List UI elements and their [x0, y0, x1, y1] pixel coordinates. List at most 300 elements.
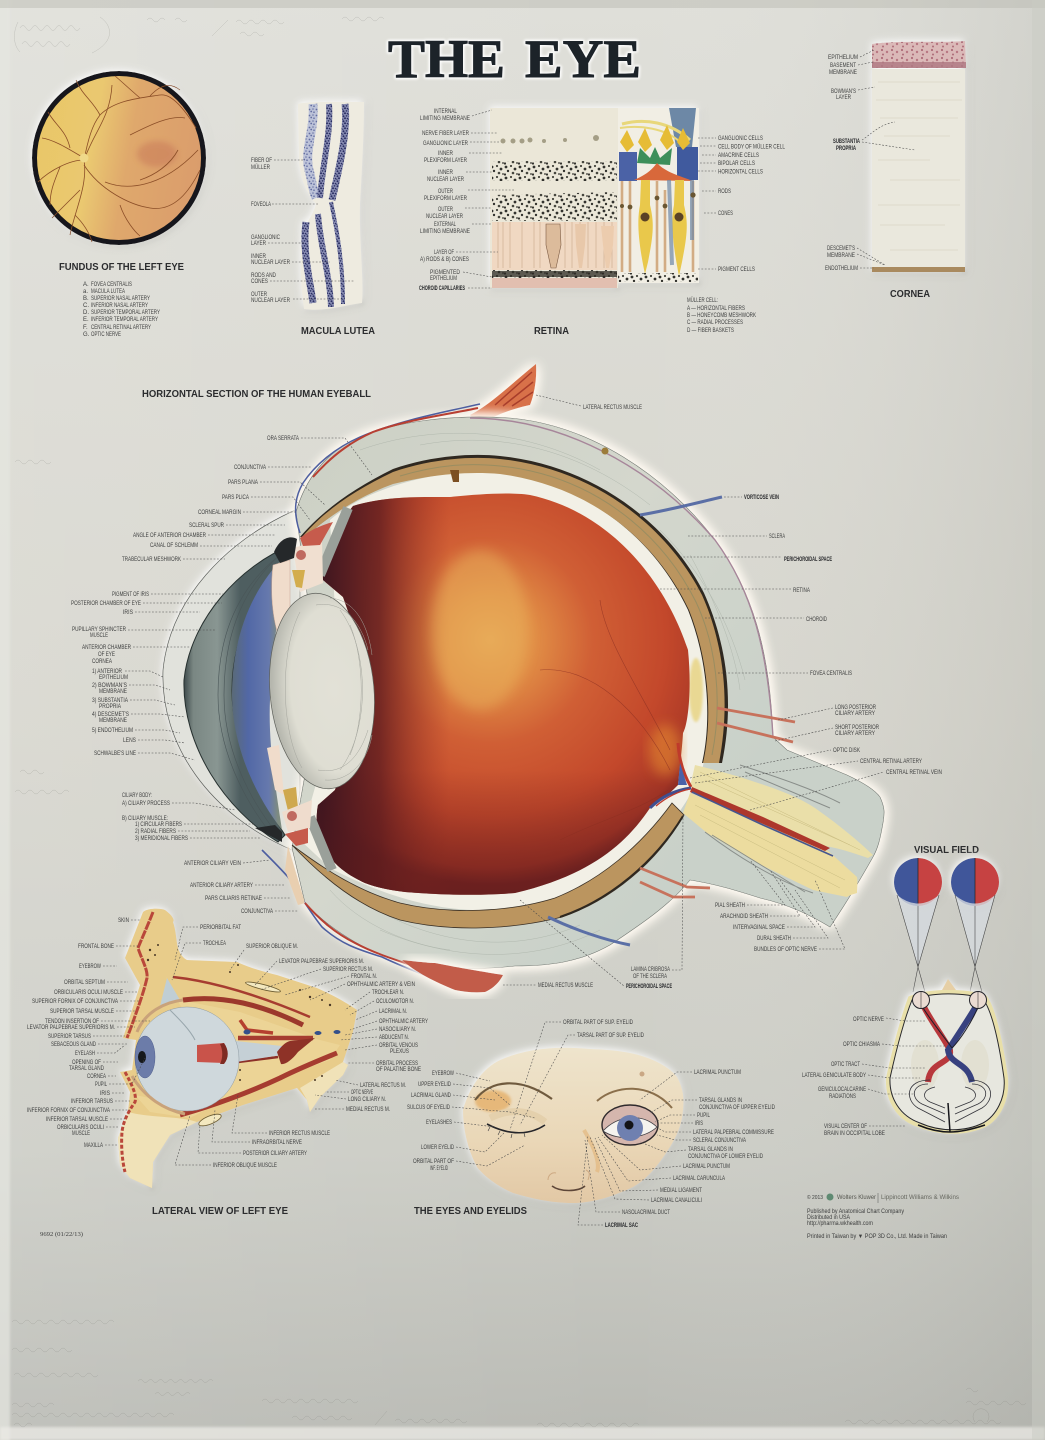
legend: G. — [83, 332, 90, 338]
retina right labels: CONES — [718, 211, 733, 217]
labels right: MEDIAL RECTUS M. — [346, 1107, 390, 1113]
labels right — [510, 1020, 776, 1229]
anterior chamber — [184, 545, 292, 842]
right labels: LATERAL RECTUS MUSCLE — [583, 405, 642, 411]
macula labels: RODS AND — [251, 273, 277, 279]
cornea labels: MEMBRANE — [827, 253, 855, 259]
posterior ciliary arteries — [640, 708, 795, 897]
left labels: CONJUNCTIVA — [241, 909, 273, 915]
muller cell key — [687, 297, 756, 334]
legend: SUPERIOR NASAL ARTERY — [91, 296, 150, 302]
macula labels: NUCLEAR LAYER — [251, 260, 291, 266]
retina left labels: A) RODS & B) CONES — [420, 257, 469, 263]
retina right labels: AMACRINE CELLS — [718, 153, 759, 159]
zonule fibres — [310, 508, 348, 870]
retina cream layer — [300, 470, 710, 910]
labels right: OF PALATINE BONE — [376, 1067, 421, 1073]
left labels: PARS CILIARIS RETINAE — [205, 896, 262, 902]
left labels: MEMBRANE — [99, 718, 127, 724]
labels left: INFERIOR TARSUS — [71, 1099, 113, 1105]
labels right: LACRIMAL N. — [379, 1009, 407, 1015]
open eye — [597, 1089, 672, 1145]
cornea labels: MEMBRANE — [829, 70, 857, 76]
panel: retina — [419, 108, 786, 337]
legend: SUPERIOR TEMPORAL ARTERY — [91, 310, 160, 316]
labels right: OPHTHALMIC ARTERY — [379, 1019, 428, 1025]
labels right: ABDUCENT N. — [379, 1035, 409, 1041]
labels right: ORBITAL PROCESS — [376, 1061, 418, 1067]
right labels: PERICHOROIDAL SPACE — [626, 984, 672, 990]
choroid upper band — [300, 455, 728, 763]
labels right — [172, 925, 428, 1169]
pathway labels — [802, 1017, 945, 1137]
labels right: CONJUNCTIVA OF UPPER EYELID — [699, 1105, 776, 1111]
retina left labels: INTERNAL — [434, 109, 458, 115]
retina left labels — [419, 109, 515, 292]
labels right: TARSAL PART OF SUP. EYELID — [577, 1033, 645, 1039]
retina left labels: PLEXIFORM LAYER — [424, 158, 468, 164]
brow and lid muscles — [122, 912, 337, 1172]
retina right labels: HORIZONTAL CELLS — [718, 170, 763, 176]
retina left labels: NUCLEAR LAYER — [427, 177, 464, 183]
left labels: OF EYE — [98, 652, 115, 658]
retina left labels: INNER — [438, 170, 454, 176]
title — [388, 29, 641, 89]
fundus: retinal interior — [317, 494, 690, 895]
labels left: ORBITAL PART OF — [413, 1159, 454, 1165]
pathway labels: BRAIN IN OCCIPITAL LOBE — [824, 1131, 885, 1137]
left labels: ANTERIOR CHAMBER — [82, 645, 132, 651]
labels left: EYEBROW — [432, 1071, 454, 1077]
labels left: UPPER EYELID — [418, 1082, 451, 1088]
labels right: FRONTAL N. — [351, 974, 377, 980]
heading: THE EYES AND EYELIDS — [414, 1206, 527, 1217]
publisher credits — [807, 1193, 960, 1240]
central retinal vessels at optic disc — [650, 743, 691, 808]
left labels: CANAL OF SCHLEMM — [150, 543, 198, 549]
labels right: OPTIC NERVE — [351, 1090, 373, 1096]
heading: FUNDUS OF THE LEFT EYE — [59, 262, 184, 273]
labels right: PLEXUS — [390, 1049, 409, 1055]
labels right: SUPERIOR OBLIQUE M. — [246, 944, 298, 950]
macula cross-section — [298, 102, 364, 310]
publisher credits: Wolters Kluwer — [837, 1194, 877, 1201]
macula labels: CONES — [251, 279, 268, 285]
small choroid spot — [450, 448, 608, 482]
labels left: PUPIL — [95, 1082, 107, 1088]
labels right: ORBITAL PART OF SUP. EYELID — [563, 1020, 634, 1026]
left labels: ANTERIOR CILIARY VEIN — [184, 861, 241, 867]
right labels: CILIARY ARTERY — [835, 731, 875, 737]
labels left: LOWER EYELID — [421, 1145, 454, 1151]
labels right: SCLERAL CONJUNCTIVA — [693, 1138, 746, 1144]
pathway labels: RADIATIONS — [829, 1094, 856, 1100]
right labels: FOVEA CENTRALIS — [810, 671, 852, 677]
sclera and optic nerve sheath — [292, 417, 884, 969]
retina left labels: NUCLEAR LAYER — [426, 214, 463, 220]
left labels: 1) CIRCULAR FIBERS — [135, 822, 182, 828]
labels left — [27, 918, 150, 1149]
title: EYE — [525, 29, 641, 89]
muller cell key: MÜLLER CELL: — [687, 297, 718, 304]
left labels: 1) ANTERIOR — [92, 669, 123, 675]
right labels: CENTRAL RETINAL ARTERY — [860, 759, 922, 765]
left labels — [71, 436, 372, 915]
left labels: ANGLE OF ANTERIOR CHAMBER — [133, 533, 207, 539]
right labels: OF THE SCLERA — [633, 974, 667, 980]
iris — [232, 555, 288, 830]
lens — [262, 589, 382, 793]
retina left labels: LIMITING MEMBRANE — [420, 116, 470, 122]
retina left labels: OUTER — [438, 189, 453, 195]
legend: OPTIC NERVE — [91, 332, 121, 338]
panel: cornea — [825, 41, 966, 300]
retina right labels: BIPOLAR CELLS — [718, 161, 755, 167]
icon: publisher logo — [826, 1194, 834, 1200]
icon: left visual field sphere — [894, 858, 942, 906]
labels left: SKIN — [118, 918, 129, 924]
labels right: TROCHLEAR N. — [372, 990, 404, 996]
pathway labels: VISUAL CENTER OF — [824, 1124, 867, 1130]
ovals: nerve sections — [197, 980, 281, 1128]
labels right: SUPERIOR RECTUS M. — [323, 967, 373, 973]
skull eyes — [912, 992, 986, 1008]
left labels: 2) BOWMAN'S — [92, 683, 127, 689]
right labels: MEDIAL RECTUS MUSCLE — [538, 983, 593, 989]
muller cell key: A — HORIZONTAL FIBERS — [687, 306, 745, 312]
cornea labels: BASEMENT — [830, 63, 856, 69]
heading: MACULA LUTEA — [301, 326, 375, 337]
right labels: ARACHNOID SHEATH — [720, 914, 768, 920]
labels right: LEVATOR PALPEBRAE SUPERIORIS M. — [279, 959, 364, 965]
legend: B. — [83, 296, 89, 302]
labels left: EYELASHES — [426, 1120, 452, 1126]
labels right: OCULOMOTOR N. — [376, 999, 414, 1005]
left labels: PARS PLANA — [228, 480, 258, 486]
vorticose veins — [548, 497, 722, 945]
outer vessels: top — [296, 404, 480, 533]
projection cones — [897, 895, 995, 992]
labels right: MEDIAL LIGAMENT — [660, 1188, 702, 1194]
right labels: INTERVAGINAL SPACE — [733, 925, 785, 931]
right labels: SCLERA — [769, 534, 785, 540]
left labels: MEMBRANE — [99, 689, 127, 695]
right labels: LONG POSTERIOR — [835, 705, 877, 711]
retina left labels: LIMITING MEMBRANE — [420, 229, 470, 235]
medial rectus muscle — [402, 960, 503, 992]
retina left labels: GANGLIONIC LAYER — [423, 141, 469, 147]
right labels: OPTIC DISK — [833, 748, 860, 754]
left labels: 2) RADIAL FIBERS — [135, 829, 176, 835]
labels right: POSTERIOR CILIARY ARTERY — [243, 1151, 307, 1157]
catalogue number: 9692 (01/22/13) — [40, 1231, 83, 1238]
labels right: PERIORBITAL FAT — [200, 925, 241, 931]
retina left labels: PLEXIFORM LAYER — [424, 196, 468, 202]
choroid lower band — [292, 803, 684, 928]
lateral rectus muscle — [470, 364, 536, 425]
retina left labels: CHOROID CAPILLARIES — [419, 286, 465, 292]
labels left: EYEBROW — [79, 964, 101, 970]
labels left: ORBICULARIS OCULI MUSCLE — [54, 990, 123, 996]
labels right: ORBITAL VENOUS — [379, 1043, 418, 1049]
labels right: CONJUNCTIVA OF LOWER EYELID — [688, 1154, 764, 1160]
left labels: CORNEAL MARGIN — [198, 510, 241, 516]
labels right: PUPIL — [697, 1113, 710, 1119]
right labels: RETINA — [793, 588, 810, 594]
labels right: INFERIOR RECTUS MUSCLE — [269, 1131, 330, 1137]
sclera fibre lines — [330, 433, 745, 954]
right labels: PIAL SHEATH — [715, 903, 745, 909]
left labels: TRABECULAR MESHWORK — [122, 557, 181, 563]
title: EYE — [525, 29, 641, 89]
left labels: EPITHELIUM — [99, 675, 128, 681]
optic pathways — [909, 1003, 991, 1132]
publisher credits: Lippincott Williams & Wilkins — [881, 1194, 960, 1201]
labels left: IRIS — [100, 1091, 110, 1097]
cornea block — [872, 41, 966, 272]
right labels: PERICHOROIDAL SPACE — [784, 557, 832, 563]
labels left: INF. EYELID — [430, 1166, 448, 1172]
labels right: TARSAL GLANDS IN — [688, 1147, 733, 1153]
retina right labels: RODS — [718, 189, 731, 195]
right labels: SHORT POSTERIOR — [835, 725, 880, 731]
legend: E. — [83, 317, 89, 323]
icon: right visual field sphere — [951, 858, 999, 906]
labels right: TROCHLEA — [203, 941, 226, 947]
muscle stump — [277, 1038, 315, 1064]
macula labels: FIBER OF — [251, 158, 272, 164]
left labels: PROPRIA — [99, 704, 121, 710]
labels left: INFERIOR TARSAL MUSCLE — [46, 1117, 108, 1123]
cornea labels: PROPRIA — [836, 146, 856, 152]
legend: A. — [83, 282, 89, 288]
labels left: FRONTAL BONE — [78, 944, 114, 950]
nose — [548, 1130, 598, 1190]
left labels: A) CILIARY PROCESS — [122, 801, 170, 807]
legend: C. — [83, 303, 89, 309]
mole — [640, 1072, 644, 1076]
right labels: DURAL SHEATH — [757, 936, 791, 942]
labels left: SULCUS OF EYELID — [407, 1105, 450, 1111]
cornea labels — [825, 50, 915, 272]
labels left: INFERIOR FORNIX OF CONJUNCTIVA — [27, 1108, 110, 1114]
labels right: LONG CILIARY N. — [348, 1097, 386, 1103]
pathway labels: OPTIC TRACT — [831, 1062, 860, 1068]
skull outline and brain — [888, 979, 1006, 1132]
left labels: SCLERAL SPUR — [189, 523, 225, 529]
title: THE — [388, 29, 505, 89]
orbit bones and tissue — [118, 909, 357, 1188]
labels right: LACRIMAL CANALICULI — [651, 1198, 702, 1204]
labels left: CORNEA — [87, 1074, 106, 1080]
legend: INFERIOR TEMPORAL ARTERY — [91, 317, 158, 323]
labels left: SUPERIOR TARSUS — [48, 1034, 91, 1040]
panel: macula lutea — [251, 102, 375, 337]
panel: visual field — [802, 845, 1006, 1137]
labels left: TARSAL GLAND — [69, 1066, 105, 1072]
labels right: LACRIMAL PUNCTUM — [694, 1070, 741, 1076]
panel: the eyes and eyelids — [407, 1020, 776, 1229]
icon: fundus disc — [34, 74, 204, 242]
labels right: LATERAL RECTUS M. — [360, 1083, 406, 1089]
publisher credits: Printed in Taiwan by ▼ POP 3D Co., Ltd. Made in Taiwan — [807, 1234, 947, 1240]
left labels: 3) MERIDIONAL FIBERS — [135, 836, 188, 842]
left labels: 5) ENDOTHELIUM — [92, 728, 133, 734]
cornea labels: EPITHELIUM — [828, 55, 858, 61]
right labels: BUNDLES OF OPTIC NERVE — [754, 947, 817, 953]
left labels: B) CILIARY MUSCLE: — [122, 816, 168, 822]
retina right labels: PIGMENT CELLS — [718, 267, 755, 273]
retina right labels: GANGLIONIC CELLS — [718, 136, 763, 142]
cornea outer shell — [163, 508, 300, 850]
left labels: ORA SERRATA — [267, 436, 299, 442]
legend: MACULA LUTEA — [91, 289, 125, 295]
closed eye — [475, 1083, 552, 1138]
macula labels: MÜLLER — [251, 164, 271, 171]
cornea labels: LAYER — [836, 95, 852, 101]
labels right: IRIS — [695, 1121, 703, 1127]
retina left labels: NERVE FIBER LAYER — [422, 131, 470, 137]
legend: INFERIOR NASAL ARTERY — [91, 303, 148, 309]
muller cell key: D — FIBER BASKETS — [687, 328, 734, 334]
macula labels: FOVEOLA — [251, 202, 271, 208]
retina left labels: EXTERNAL — [434, 222, 456, 228]
publisher credits: Distributed in USA — [807, 1215, 850, 1221]
labels left: ORBITAL SEPTUM — [64, 980, 105, 986]
retina right labels — [698, 136, 786, 273]
retina left labels: PIGMENTED — [430, 270, 461, 276]
labels right: OPHTHALMIC ARTERY & VEIN — [347, 982, 415, 988]
labels right: NASOLACRIMAL DUCT — [622, 1210, 670, 1216]
publisher credits: © 2013 — [807, 1194, 823, 1201]
macula labels — [251, 158, 355, 304]
legend: F. — [83, 325, 88, 331]
pathway labels: OPTIC CHIASMA — [843, 1042, 880, 1048]
labels right: LACRIMAL SAC — [605, 1223, 638, 1229]
cornea labels: BOWMAN'S — [831, 89, 856, 95]
pathway labels: LATERAL GENICULATE BODY — [802, 1073, 866, 1079]
labels right: INFRAORBITAL NERVE — [252, 1140, 302, 1146]
legend: CENTRAL RETINAL ARTERY — [91, 325, 151, 331]
left labels: LENS — [123, 738, 136, 744]
ciliary body and muscle — [255, 522, 333, 846]
title: THE — [388, 29, 505, 89]
heading: RETINA — [534, 326, 569, 337]
labels left: OPENING OF — [72, 1060, 101, 1066]
left labels: MUSCLE — [90, 633, 108, 639]
cornea labels: ENDOTHELIUM — [825, 266, 858, 272]
labels left — [407, 1071, 535, 1172]
chamber ribs — [218, 553, 282, 835]
publisher credits: Published by Anatomical Chart Company — [807, 1209, 904, 1215]
macula labels: LAYER — [251, 241, 267, 247]
heading: CORNEA — [890, 289, 930, 300]
pathway labels: GENICULOCALCARINE — [818, 1087, 866, 1093]
face relief — [463, 1048, 683, 1203]
macula labels: OUTER — [251, 292, 268, 298]
legend — [83, 282, 160, 338]
left labels: PUPILLARY SPHINCTER — [72, 627, 127, 633]
right labels: VORTICOSE VEIN — [744, 495, 779, 501]
heading: VISUAL FIELD — [914, 845, 979, 856]
left labels: ANTERIOR CILIARY ARTERY — [190, 883, 253, 889]
muller cell key: C — RADIAL PROCESSES — [687, 320, 743, 326]
cornea labels: SUBSTANTIA — [833, 139, 860, 145]
labels right: LATERAL PALPEBRAL COMMISSURE — [693, 1130, 774, 1136]
retina block — [490, 108, 699, 288]
cornea labels: DESCEMET'S — [827, 246, 855, 252]
optic nerve bundles — [683, 765, 873, 897]
retina left labels: EPITHELIUM — [430, 276, 457, 282]
labels left: EYELASH — [75, 1051, 95, 1057]
conjunctival peach flap — [285, 846, 305, 905]
outer vessels: bottom — [262, 850, 445, 983]
legend: FOVEA CENTRALIS — [91, 282, 132, 288]
right labels — [503, 395, 942, 990]
panel: horizontal section of eyeball — [71, 364, 942, 992]
macula labels: NUCLEAR LAYER — [251, 298, 291, 304]
bone texture — [147, 944, 331, 1081]
left labels: SCHWALBE'S LINE — [94, 751, 136, 757]
retina right labels: CELL BODY OF MÜLLER CELL — [718, 144, 786, 150]
right labels: CENTRAL RETINAL VEIN — [886, 770, 942, 776]
left labels: 3) SUBSTANTIA — [92, 698, 128, 704]
left labels: PIGMENT OF IRIS — [112, 592, 149, 598]
heading: horizontal section: HORIZONTAL SECTION OF THE HUMAN EYEBALL — [142, 389, 371, 400]
labels right: LACRIMAL CARUNCULA — [673, 1176, 725, 1182]
retina left labels: LAYER OF — [434, 250, 454, 256]
pathway labels: OPTIC NERVE — [853, 1017, 884, 1023]
lacrimal gland patch — [475, 1090, 511, 1112]
left labels: POSTERIOR CHAMBER OF EYE — [71, 601, 141, 607]
labels left: LEVATOR PALPEBRAE SUPERIORIS M. — [27, 1025, 115, 1031]
labels right: INFERIOR OBLIQUE MUSCLE — [213, 1163, 277, 1169]
pale soft tissue — [135, 975, 340, 1118]
panel: lateral view of left eye — [27, 909, 428, 1217]
macula labels: INNER — [251, 254, 267, 260]
legend: a. — [83, 289, 88, 295]
left labels: CORNEA — [92, 659, 112, 665]
right labels: CHOROID — [806, 617, 827, 623]
left labels: CONJUNCTIVA — [234, 465, 266, 471]
maxilla pale bone — [118, 1062, 348, 1188]
labels left: MUSCLE — [72, 1131, 90, 1137]
retina left labels: INNER — [438, 151, 454, 157]
labels left: SEBACEOUS GLAND — [51, 1042, 96, 1048]
heading: LATERAL VIEW OF LEFT EYE — [152, 1206, 288, 1217]
labels left: MAXILLA — [84, 1143, 103, 1149]
labels left: SUPERIOR FORNIX OF CONJUNCTIVA — [32, 999, 118, 1005]
macula labels: GANGLIONIC — [251, 235, 281, 241]
vessels cut ends — [244, 1030, 340, 1035]
eyelids — [132, 1000, 185, 1114]
optic nerve — [236, 1041, 282, 1062]
labels left: ORBICULARIS OCULI — [57, 1125, 104, 1131]
labels left: SUPERIOR TARSAL MUSCLE — [50, 1009, 114, 1015]
labels left: TENDON INSERTION OF — [45, 1019, 99, 1025]
muller cell key: B — HONEYCOMB MESHWORK — [687, 313, 756, 319]
right labels: CILIARY ARTERY — [835, 711, 875, 717]
labels left: LACRIMAL GLAND — [411, 1093, 452, 1099]
labels right: NASOCILIARY N. — [379, 1027, 416, 1033]
panel: fundus of the left eye — [34, 74, 204, 338]
publisher credits: http://pharma.wkhealth.com — [807, 1221, 873, 1227]
left labels: 4) DESCEMET'S — [92, 712, 129, 718]
retina left labels: OUTER — [438, 207, 453, 213]
left labels: IRIS — [123, 610, 133, 616]
left labels: PARS PLICA — [222, 495, 249, 501]
labels right: TARSAL GLANDS IN — [699, 1098, 742, 1104]
